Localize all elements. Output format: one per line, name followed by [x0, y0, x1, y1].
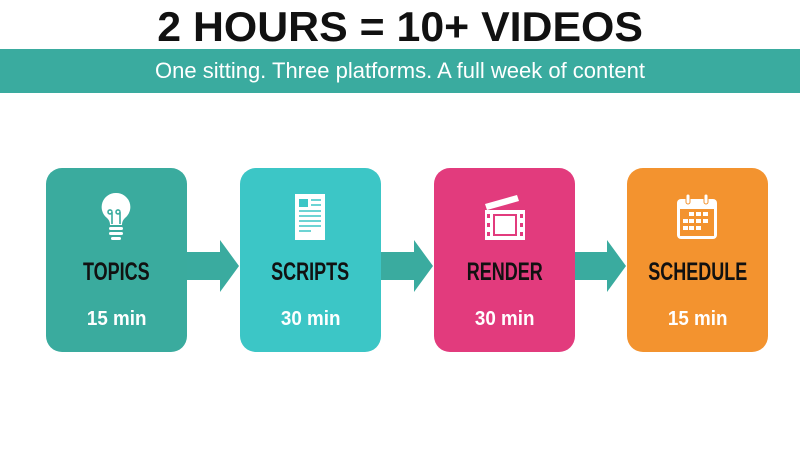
arrow 3 — [575, 240, 626, 292]
icon: light bulb — [102, 193, 130, 240]
time: 15 min: 15 min — [87, 308, 146, 330]
label: schedule: SCHEDULE — [648, 258, 747, 286]
title: 2 HOURS = 10+ VIDEOS — [157, 3, 643, 50]
panel: scripts — [240, 168, 381, 352]
arrow 1 — [187, 240, 239, 292]
label: render: RENDER — [466, 258, 543, 286]
panel: render — [434, 168, 575, 352]
arrow 2 — [381, 240, 433, 292]
label: topics: TOPICS — [83, 258, 150, 286]
subtitle band: One sitting. Three platforms. A full week of content — [155, 58, 645, 83]
icon: clapperboard film — [485, 195, 525, 240]
time: 30 min: 30 min — [475, 308, 534, 330]
time: 15 min: 15 min — [668, 308, 727, 330]
panel: topics — [46, 168, 187, 352]
icon: document — [295, 194, 325, 240]
icon: calendar — [677, 194, 717, 239]
time: 30 min: 30 min — [281, 308, 340, 330]
panel: schedule — [627, 168, 768, 352]
subtitle band — [0, 49, 800, 93]
label: scripts: SCRIPTS — [271, 258, 350, 286]
